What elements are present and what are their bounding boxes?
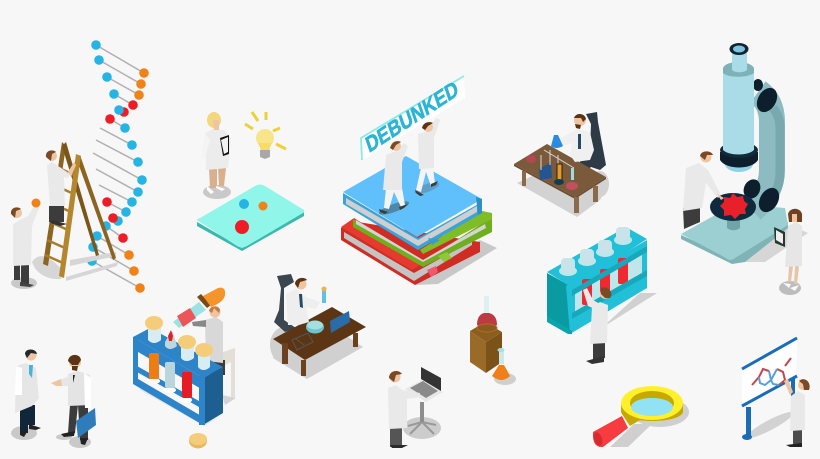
icon: light bulb — [245, 112, 286, 159]
molecule plate — [197, 184, 304, 251]
molecule diagram — [752, 358, 791, 385]
two scientists talking — [11, 350, 96, 448]
scientist seated — [558, 114, 594, 162]
scientist with clipboard — [201, 112, 231, 199]
fallen orange cap — [189, 433, 207, 448]
scientist with clipboard at microscope — [774, 209, 802, 295]
briefcase — [76, 408, 96, 438]
shadow — [737, 225, 808, 262]
scientist at red rack — [583, 287, 611, 364]
green book — [353, 211, 492, 267]
arm — [752, 92, 772, 210]
base — [681, 222, 788, 264]
scientist on ladder — [46, 150, 76, 226]
giant microscope — [681, 43, 808, 264]
stem and stage — [727, 210, 740, 230]
scientist carrying banner left — [378, 141, 410, 217]
red test tube rack — [547, 227, 657, 334]
lab desk with chemistry apparatus — [514, 112, 609, 217]
seated scientist body — [286, 289, 320, 325]
book stack shadow — [415, 240, 497, 285]
scientist at microscope — [683, 151, 724, 229]
magnifying glass — [592, 386, 689, 447]
blue flask in hand — [551, 135, 563, 148]
blue test tube rack with pipette — [133, 288, 236, 426]
scientist left — [15, 350, 41, 437]
pipette — [173, 302, 206, 328]
whiteboard with molecule — [742, 338, 797, 442]
glass apparatus — [526, 155, 536, 163]
scientist at whiteboard — [784, 379, 810, 447]
tubes with caps — [148, 328, 161, 343]
scientist behind rack — [192, 306, 225, 375]
flask on brown box — [470, 296, 502, 373]
scientist handing orange ball — [11, 198, 40, 289]
orange flask — [492, 348, 516, 385]
chair — [223, 348, 235, 400]
red book — [341, 218, 480, 285]
body tube — [725, 156, 753, 172]
banner: DEBUNKED: DEBUNKED — [363, 76, 461, 158]
scientist right — [51, 355, 96, 445]
DNA double helix — [87, 40, 149, 293]
blue book — [343, 156, 482, 250]
scientist with laptop stand — [388, 367, 443, 448]
scientist carrying banner right — [413, 118, 441, 196]
office chair — [578, 112, 606, 172]
ladder — [32, 142, 118, 281]
second lab desk with seated scientist — [270, 274, 366, 379]
